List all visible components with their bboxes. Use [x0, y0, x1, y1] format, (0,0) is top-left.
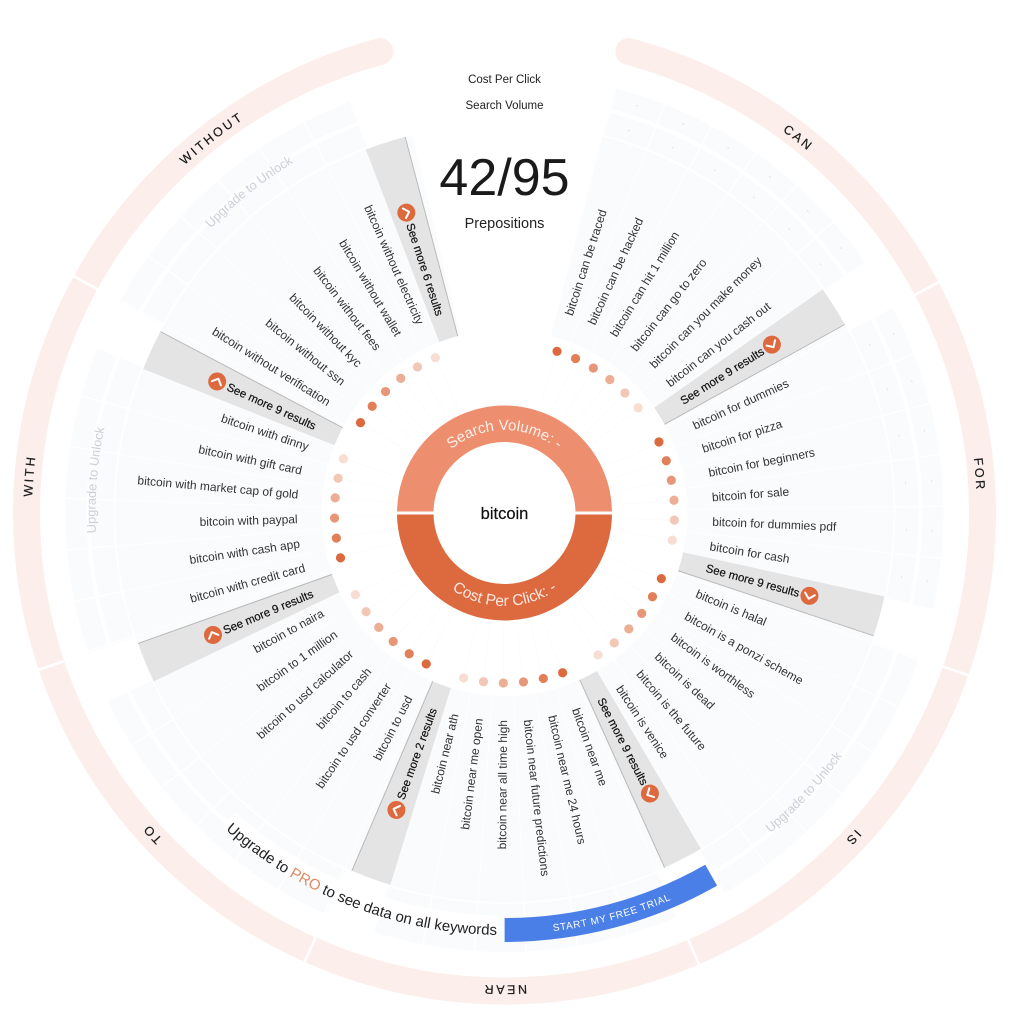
see more button: [395, 201, 449, 318]
keyword: bitcoin for cash: [709, 539, 791, 566]
empty data values: -: [816, 260, 825, 268]
see more button: [201, 585, 316, 647]
search volume label: Search Volume: -: [447, 420, 560, 448]
empty data values: -: [928, 529, 937, 533]
keyword: bitcoin for pizza: [700, 417, 784, 456]
keyword: bitcoin can be hacked: [585, 216, 646, 327]
keyword: bitcoin without wallet: [336, 237, 405, 339]
empty data values: -: [766, 172, 774, 181]
empty data values: -: [750, 193, 758, 202]
empty data values: -: [711, 165, 719, 175]
keyword: bitcoin near ath: [428, 712, 462, 795]
locked label: is: Upgrade to Unlock: [766, 752, 842, 832]
faint spokes from donut to dots: [364, 373, 644, 653]
keyword: bitcoin near me: [569, 706, 610, 788]
data bands: cost per click and search volume: [76, 84, 933, 942]
keyword panel background: [218, 227, 790, 799]
empty data values: -: [626, 126, 632, 135]
score dots: [330, 346, 679, 688]
empty data values: -: [901, 481, 910, 485]
center donut: [397, 406, 612, 620]
keyword: bitcoin without verification: [210, 324, 333, 409]
section: can: [562, 208, 784, 409]
cost per click label: Cost Per Click: -: [454, 582, 555, 606]
upgrade call to action: [228, 822, 718, 942]
keyword: bitcoin with paypal: [199, 512, 298, 529]
keyword: bitcoin to naira: [251, 606, 327, 656]
see more wedges: [138, 137, 874, 871]
section: near: [385, 705, 610, 877]
locked label: with: Upgrade to Unlock: [86, 426, 104, 532]
section: to: [201, 585, 415, 791]
keyword: bitcoin without kyc: [287, 291, 365, 370]
stat caption: Prepositions: [465, 216, 544, 232]
legend: cost per click: Cost Per Click: [468, 74, 541, 86]
ring label: near: NEAR: [485, 984, 526, 994]
keyword: bitcoin without ssn: [263, 316, 348, 388]
keyword: bitcoin can you make money: [647, 254, 765, 371]
empty data values: [626, 101, 937, 584]
ring label: is: IS: [847, 830, 862, 844]
keyword: bitcoin for dummies pdf: [712, 515, 837, 534]
keyword: bitcoin can be traced: [562, 208, 610, 317]
keyword: bitcoin with market cap of gold: [137, 473, 299, 502]
see more button: [704, 559, 820, 607]
section: is: [593, 587, 806, 806]
donut top: search volume: [397, 406, 612, 513]
empty data values: -: [725, 143, 732, 152]
keyword: bitcoin to 1 million: [254, 628, 340, 694]
keyword: bitcoin is the future: [633, 667, 709, 754]
see more button: [205, 370, 319, 435]
empty data values: -: [927, 479, 936, 483]
keyword: bitcoin near future predictions: [521, 719, 552, 877]
keyword: bitcoin near all time high: [495, 720, 510, 849]
keyword: bitcoin is worthless: [668, 630, 758, 701]
keyword: bitcoin is venice: [613, 683, 672, 761]
empty data values: -: [837, 244, 846, 252]
locked label: without: Upgrade to Unlock: [205, 157, 294, 227]
keyword: bitcoin is a ponzi scheme: [682, 609, 806, 688]
see more button: See more 6 results: [403, 222, 445, 318]
center keyword: bitcoin: [481, 505, 528, 523]
empty data values: -: [923, 579, 932, 584]
ring label: for: FOR: [974, 458, 985, 489]
section: for: [691, 376, 837, 607]
section: without: [210, 201, 449, 409]
keyword: bitcoin near me open: [458, 718, 486, 830]
empty data values: -: [902, 528, 911, 532]
empty data values: -: [920, 428, 930, 433]
empty data values: -: [895, 433, 904, 438]
keyword: bitcoin with dinny: [219, 411, 311, 454]
keyword: bitcoin without electricity: [361, 203, 427, 327]
keyword: bitcoin to usd calculator: [254, 647, 356, 742]
keyword: bitcoin with cash app: [189, 537, 301, 567]
keyword: bitcoin for dummies: [691, 376, 791, 432]
ring label: without: WITHOUT: [178, 112, 240, 164]
section: with: [137, 370, 319, 606]
keyword: bitcoin without fees: [310, 264, 384, 353]
keyword: bitcoin for sale: [711, 485, 790, 504]
upgrade to unlock labels: [86, 157, 842, 878]
empty data values: -: [670, 143, 676, 152]
ring label: can: CAN: [784, 126, 812, 150]
keyword: bitcoin to usd: [370, 694, 415, 763]
empty data values: -: [908, 379, 917, 384]
keyword: bitcoin is dead: [652, 650, 718, 712]
empty data values: -: [680, 119, 687, 128]
button: start my free trial: START MY FREE TRIAL: [553, 895, 670, 931]
see more button: [385, 705, 442, 821]
empty data values: -: [883, 387, 892, 392]
see more button: [677, 332, 784, 409]
see more button: See more 9 results: [594, 696, 650, 788]
empty data values: -: [785, 225, 794, 233]
ring label: with: WITH: [24, 458, 36, 496]
keyword: bitcoin can you cash out: [664, 299, 774, 390]
empty data values: -: [889, 331, 899, 337]
see more button: [593, 694, 662, 806]
upgrade message: Upgrade to PRO to see data on all keywords: [228, 822, 496, 935]
empty data values: -: [866, 342, 875, 348]
see more button: See more 9 results: [225, 382, 318, 433]
column legend: [466, 74, 544, 112]
see more button: See more 9 results: [679, 346, 767, 408]
keyword: bitcoin near me 24 hours: [545, 714, 589, 846]
keyword: bitcoin is halal: [694, 587, 769, 629]
headline stat: 42/95: [439, 149, 570, 207]
keyword: bitcoin with credit card: [188, 561, 307, 606]
see more button: See more 9 results: [704, 563, 801, 600]
keyword: bitcoin to cash: [313, 665, 374, 732]
keyword: bitcoin with gift card: [197, 442, 303, 478]
empty data values: -: [634, 101, 640, 110]
donut bottom: cost per click: [397, 513, 612, 620]
ring label: to: TO: [144, 826, 160, 845]
keyword: bitcoin to usd converter: [313, 680, 394, 791]
see more button: See more 9 results: [222, 589, 316, 637]
keyword: bitcoin for beginners: [707, 445, 816, 480]
empty data values: -: [804, 206, 812, 215]
empty data values: -: [897, 575, 906, 580]
keyword: bitcoin can go to zero: [628, 256, 710, 354]
see more button: See more 2 results: [396, 707, 440, 802]
keyword: bitcoin can hit 1 million: [607, 229, 682, 339]
legend: search volume: Search Volume: [466, 100, 544, 112]
